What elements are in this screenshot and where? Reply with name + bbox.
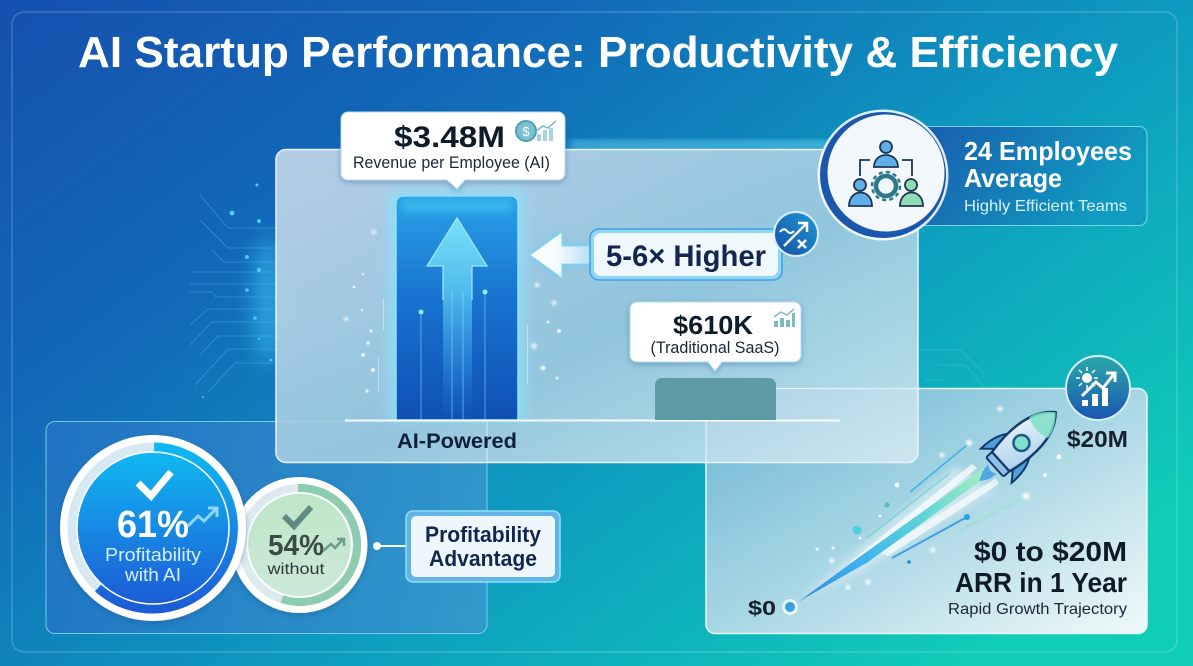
- value: 61%: [117, 504, 189, 546]
- growth trajectory: [798, 406, 1062, 602]
- gauge: 61% with AI: [60, 435, 246, 621]
- value: 5-6× Higher: [606, 240, 766, 273]
- label: $20M: $20M: [1067, 426, 1128, 452]
- baseline: [345, 420, 840, 422]
- icon: rocket: [964, 395, 1071, 498]
- caption: (Traditional SaaS): [650, 338, 780, 357]
- panel: employees: [818, 110, 1147, 240]
- label: $0: $0: [748, 598, 776, 620]
- connector: [373, 542, 409, 550]
- icon: growth badge: [1066, 356, 1130, 420]
- callout: profitability advantage: Advantage: [429, 546, 537, 571]
- icon: small trend arrow: [323, 539, 344, 551]
- heading: 24 Employees: [964, 136, 1132, 166]
- callout: 5-6x higher: [590, 212, 818, 280]
- icon: trend arrow: [188, 508, 217, 526]
- icon: mini chart: [774, 309, 795, 327]
- label: AI-Powered: AI-Powered: [397, 430, 517, 453]
- caption: Highly Efficient Teams: [964, 198, 1127, 215]
- callout: profitability advantage: [406, 511, 560, 582]
- particles: [344, 230, 561, 393]
- icon: check: [138, 472, 171, 496]
- callout: revenue per employee: [341, 112, 565, 189]
- arrow: 5-6x pointing left: [530, 232, 600, 278]
- bar: traditional SaaS: [655, 378, 776, 420]
- gauge: 61% with AI: with AI: [124, 565, 181, 585]
- callout: traditional SaaS: [630, 302, 801, 371]
- value: 54%: [268, 530, 324, 562]
- ARR growth content: [748, 356, 1130, 620]
- caption: Profitability: [105, 545, 201, 565]
- panel: employees: Average: [964, 163, 1062, 193]
- panel: ARR growth background: [706, 388, 1147, 634]
- value: $610K: [673, 310, 753, 340]
- title: AI Startup Performance: Productivity & Efficiency: [78, 28, 1119, 77]
- start dot: [782, 599, 798, 615]
- icon: multiplier badge: [774, 212, 818, 256]
- profitability content: [60, 435, 560, 621]
- panel: profitability background: [46, 422, 487, 634]
- panel: revenue comparison chart: [276, 150, 918, 462]
- heading: $0 to $20M: [974, 536, 1127, 567]
- value: $3.48M: [394, 121, 505, 154]
- callout: profitability advantage: Profitability: [425, 522, 542, 547]
- icon: up arrow: [427, 218, 487, 420]
- ARR growth content: ARR in 1 Year: [955, 567, 1127, 598]
- icon: dollar coin and chart: $: [522, 124, 530, 139]
- icon: check: [284, 507, 311, 526]
- caption: Rapid Growth Trajectory: [948, 601, 1127, 618]
- icon: team hierarchy: [818, 110, 948, 240]
- caption: without: [266, 561, 325, 578]
- bar: AI-powered: [386, 188, 528, 422]
- gauge: 54% without: [232, 477, 368, 613]
- caption: Revenue per Employee (AI): [353, 153, 550, 172]
- icon: dollar coin and chart: [516, 121, 556, 141]
